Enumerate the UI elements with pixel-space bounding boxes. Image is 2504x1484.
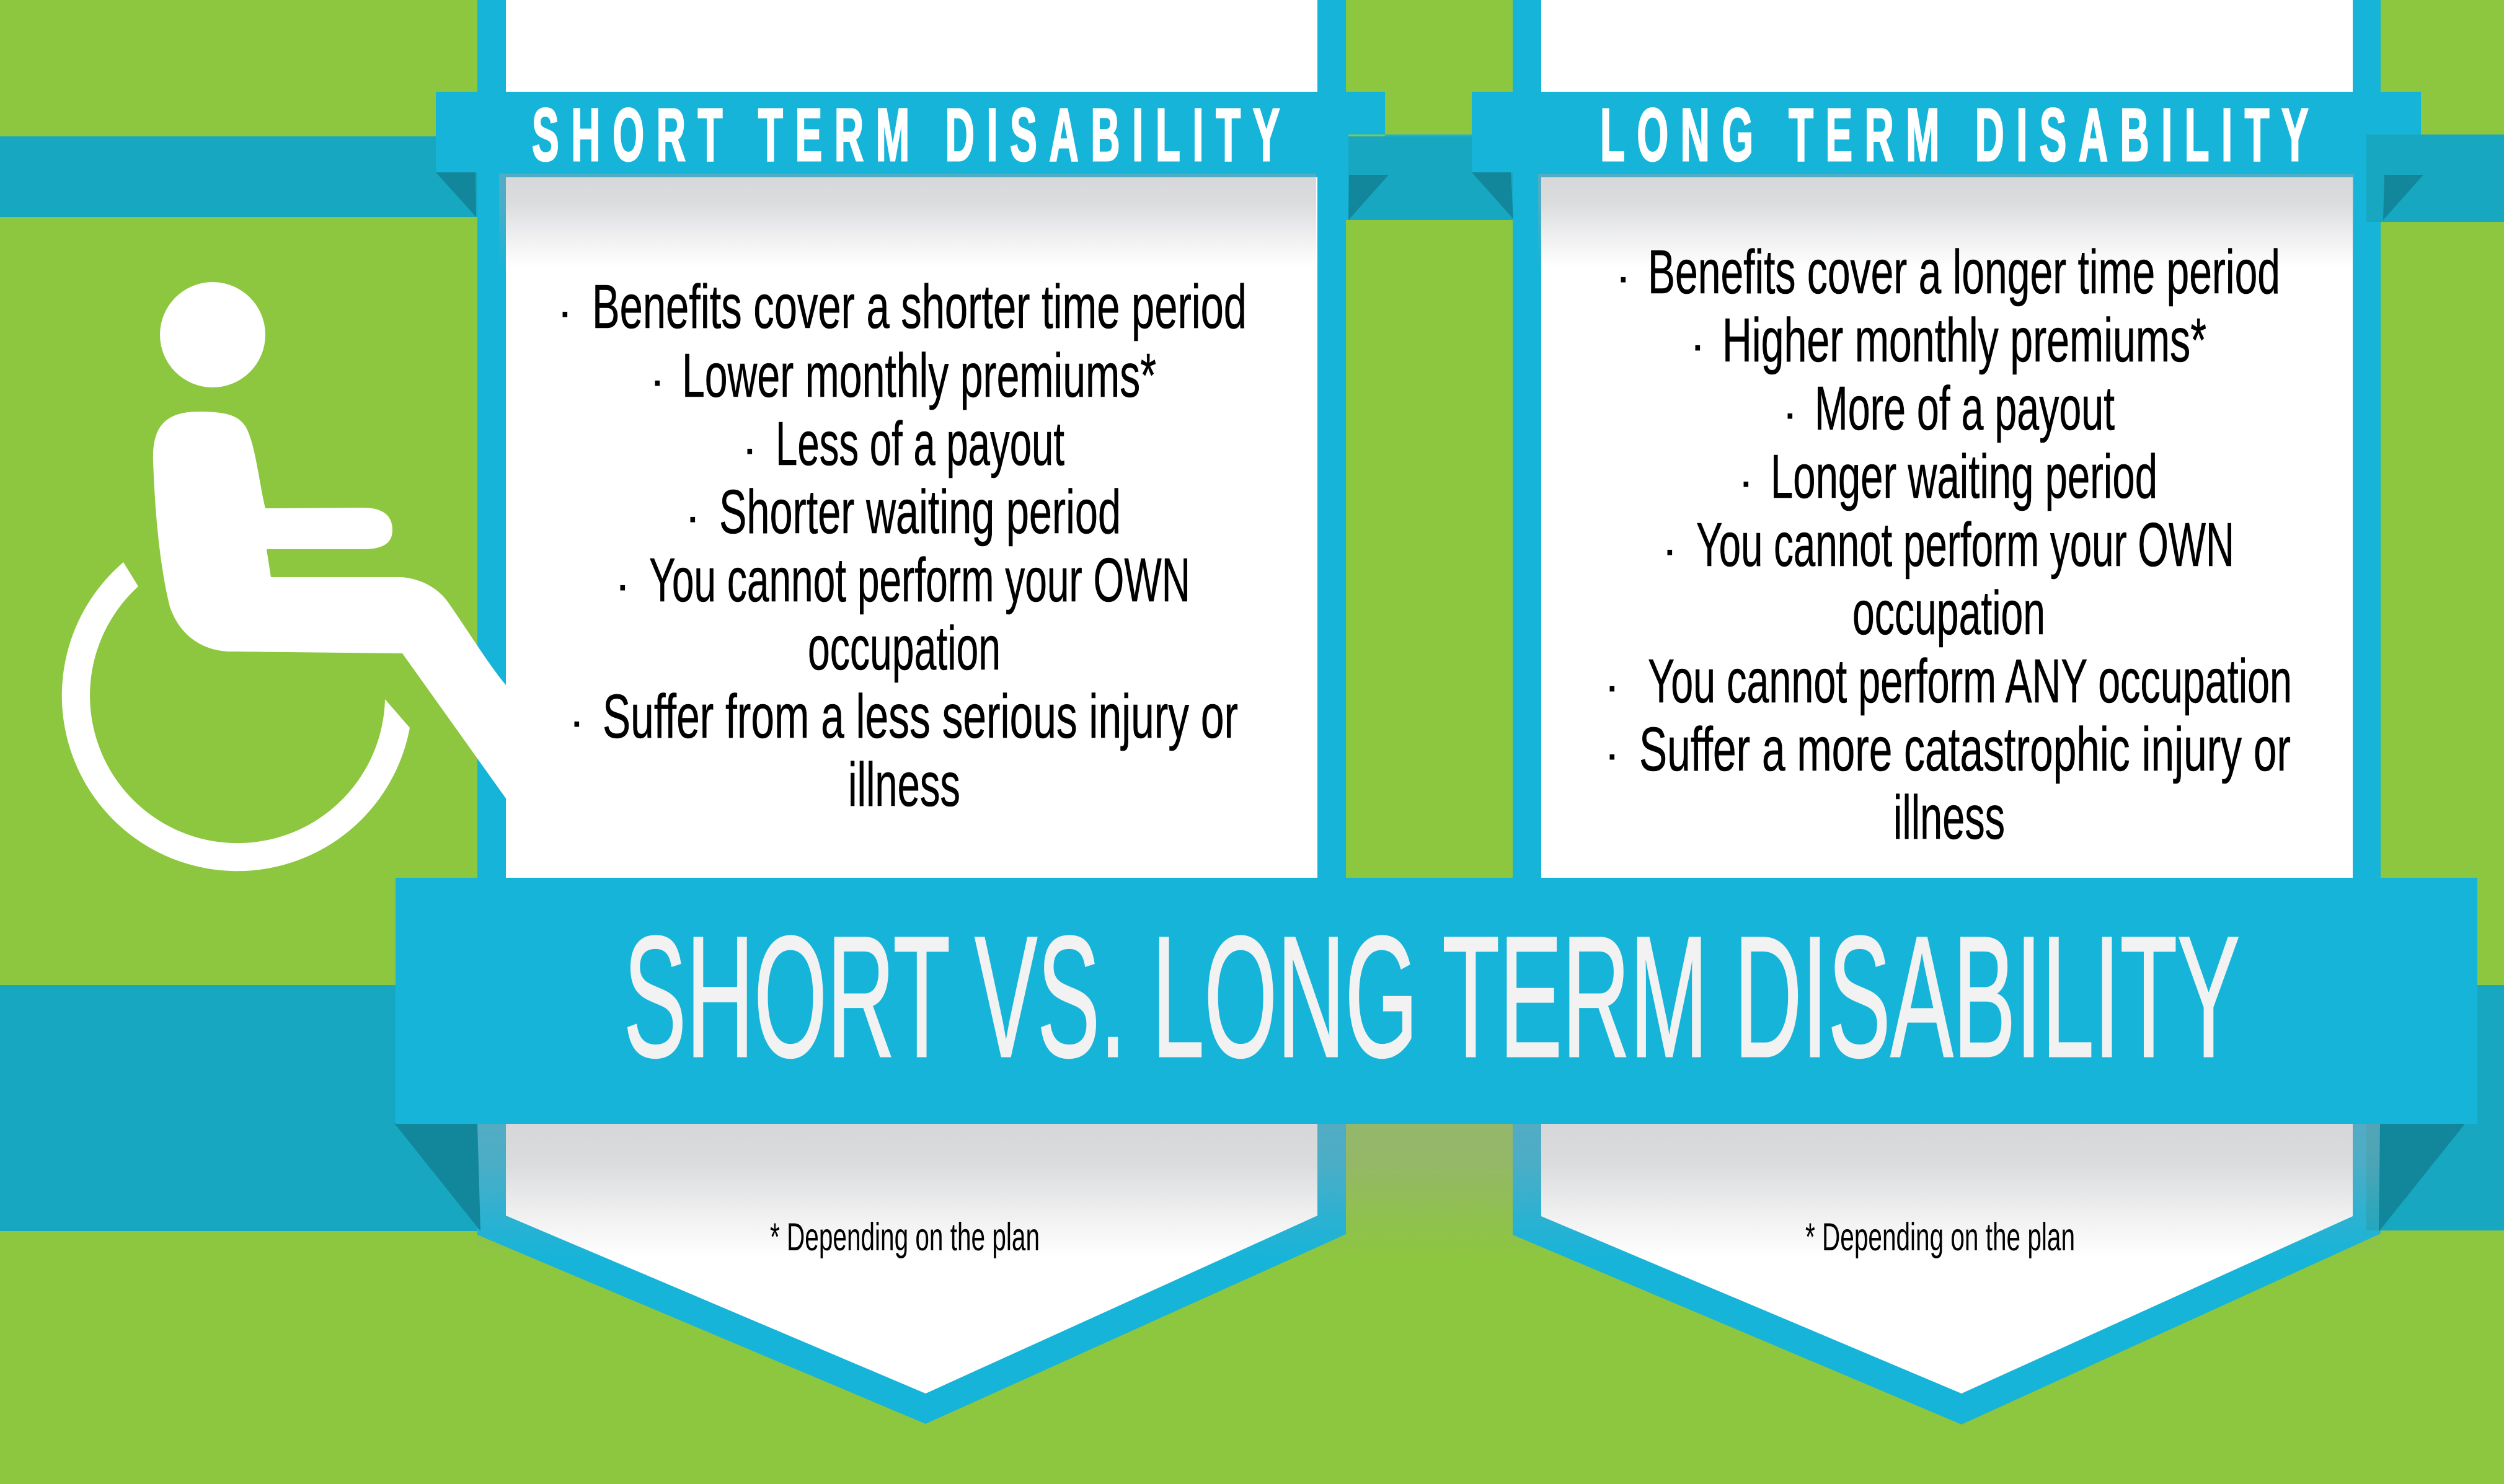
icon: wheelchair user: [62, 282, 506, 871]
panel shadow: long term top: [1538, 174, 2354, 268]
banner shadow: [477, 1124, 2381, 1258]
point: own occupation: ·: [1661, 521, 1678, 576]
point: lower premiums: Lower monthly premiums*: [682, 341, 1156, 410]
footnote: short term: * Depending on the plan: [770, 1216, 1040, 1259]
text block: short term disability points: [557, 272, 1247, 819]
panel shadow: short term top: [499, 174, 1316, 268]
point: higher premiums: ·: [1689, 317, 1706, 372]
ribbon: short term disability: [436, 92, 1385, 220]
point: longer waiting: ·: [1738, 453, 1754, 508]
point: less payout: Less of a payout: [776, 409, 1064, 479]
point: longer waiting: Longer waiting period: [1771, 442, 2157, 511]
point: higher premiums: [1689, 306, 2206, 375]
point: less serious injury: [568, 682, 1238, 819]
point: lower premiums: [649, 341, 1156, 410]
point: own occupation: You cannot perform your OWN: [649, 545, 1190, 615]
point: catastrophic injury: illness: [1893, 783, 2005, 852]
point: shorter waiting: [684, 477, 1121, 547]
point: shorter time period: Benefits cover a shorter time period: [592, 272, 1247, 342]
point: more payout: ·: [1782, 385, 1798, 440]
point: lower premiums: ·: [649, 352, 666, 407]
ribbon fold right: short term: [1348, 175, 1389, 220]
ribbon: long term disability: [1472, 92, 2421, 177]
point: more payout: More of a payout: [1815, 374, 2115, 443]
point: shorter time period: [557, 272, 1247, 342]
point: less payout: ·: [741, 420, 758, 475]
point: less payout: [741, 409, 1064, 479]
point: shorter time period: ·: [557, 283, 573, 338]
upper teal band: right: [2366, 135, 2504, 222]
footnote: long term: * Depending on the plan: [1805, 1216, 2075, 1259]
point: catastrophic injury: ·: [1604, 726, 1621, 781]
banner fold right: [2379, 1124, 2465, 1232]
point: less serious injury: ·: [568, 693, 585, 748]
point: shorter waiting: Shorter waiting period: [719, 477, 1121, 547]
point: own occupation: ·: [614, 557, 631, 612]
panel: long term disability frame: [1513, 0, 2381, 1424]
lower teal band: right: [2366, 985, 2504, 1230]
point: own occupation: [1661, 510, 2234, 648]
point: less serious injury: illness: [848, 750, 960, 819]
ribbon fold right: long term: [2383, 175, 2423, 220]
point: own occupation: occupation: [1852, 578, 2045, 648]
point: less serious injury: Suffer from a less serious injury or: [603, 682, 1238, 751]
lower teal band: left: [0, 985, 479, 1231]
point: higher premiums: Higher monthly premiums*: [1722, 306, 2206, 375]
point: any occupation: ·: [1604, 658, 1621, 713]
ribbon fold left: long term: [1472, 172, 1513, 219]
point: own occupation: [614, 545, 1190, 683]
point: shorter waiting: ·: [684, 488, 701, 544]
point: longer time period: ·: [1615, 249, 1632, 304]
point: own occupation: occupation: [808, 614, 1001, 683]
point: catastrophic injury: [1604, 715, 2291, 852]
title banner: [396, 878, 2477, 1124]
upper teal band: left: [0, 136, 477, 217]
banner fold left: [394, 1123, 480, 1231]
text block: long term disability points: [1604, 237, 2292, 852]
heading: short term disability: SHORT TERM DISABILITY: [532, 92, 1292, 177]
ribbon fold left: short term: [436, 172, 476, 217]
upper teal band: middle: [1348, 135, 1513, 220]
panel: short term disability frame: [477, 0, 1346, 1424]
point: more payout: [1782, 374, 2115, 443]
point: longer waiting: [1738, 442, 2157, 511]
